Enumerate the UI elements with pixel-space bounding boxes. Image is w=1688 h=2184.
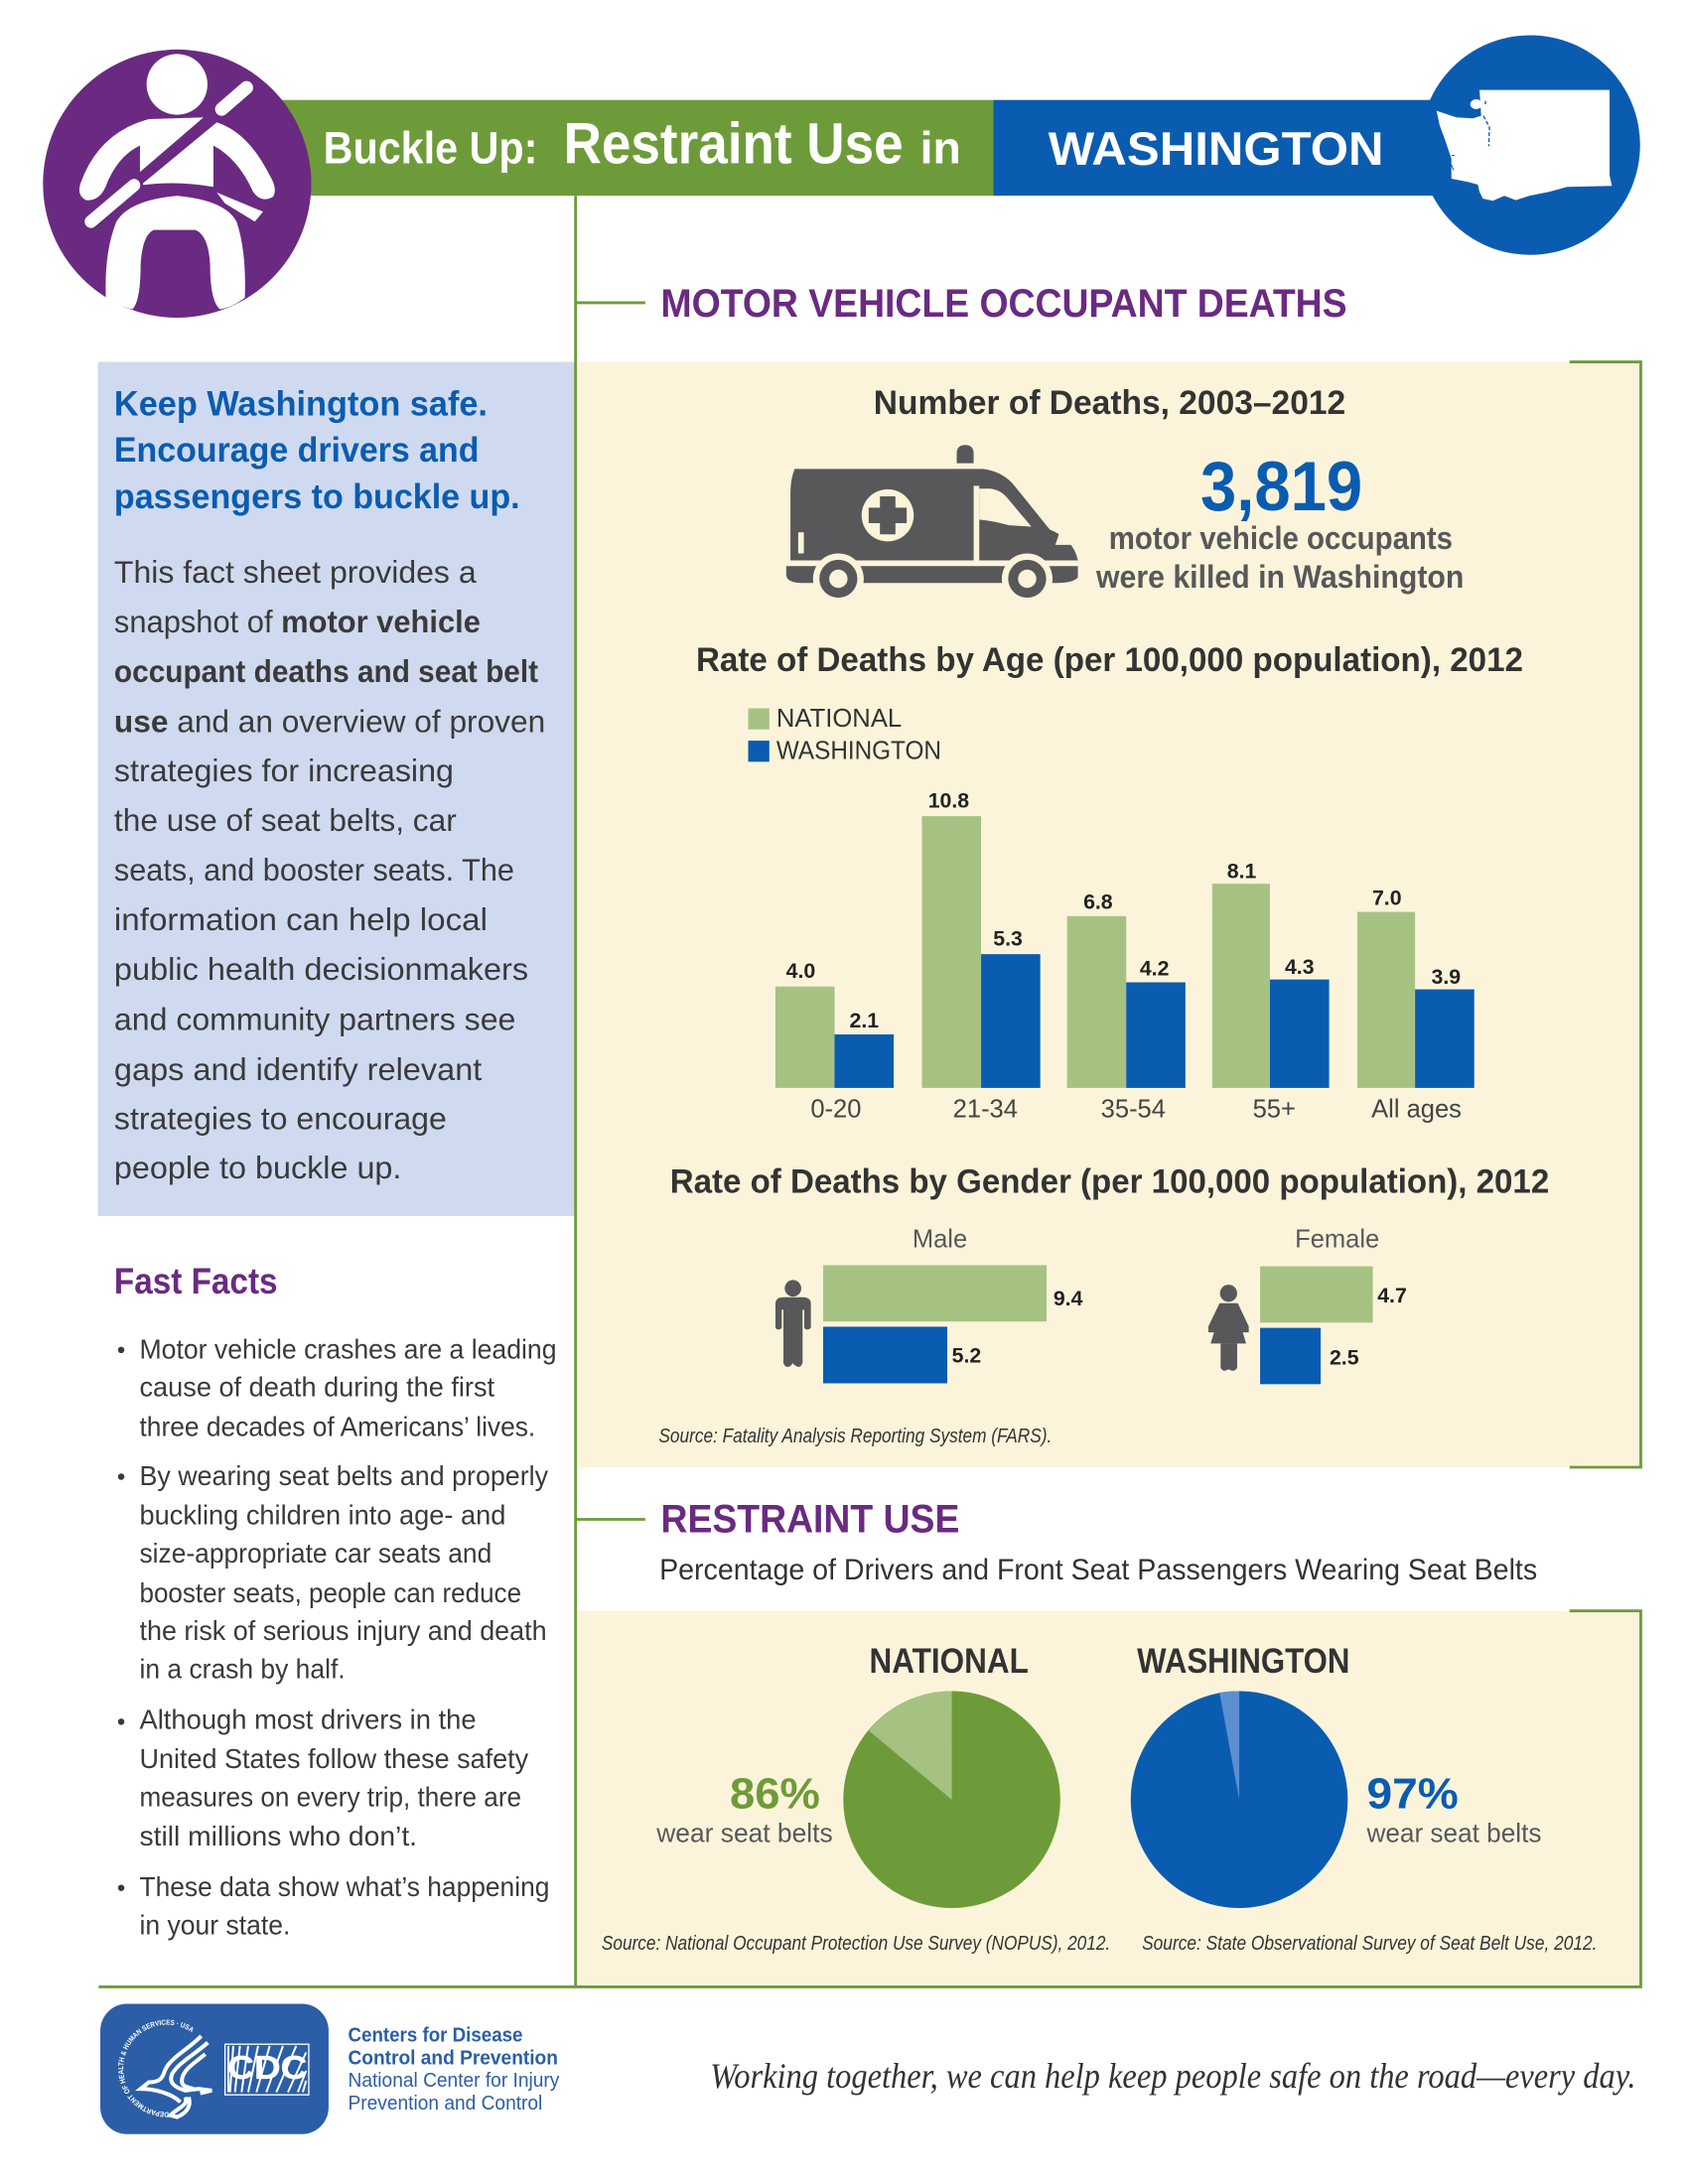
fast facts heading: Fast Facts (114, 1261, 278, 1301)
source note: NOPUS: Source: National Occupant Protection Use Survey (NOPUS), 2012. (602, 1933, 1110, 1955)
heading: rate by age: Rate of Deaths by Age (per 100,000 population), 2012 (696, 641, 1523, 679)
statistic: 3,819 (1095, 448, 1464, 595)
banner title text: in (920, 123, 961, 174)
intro heading: Keep Washington safe. (114, 383, 488, 423)
logo: HHS and CDC: DEPARTMENT OF HEALTH & HUMAN SERVICES · USA (118, 2019, 193, 2117)
bar chart: rate by age: All ages (1371, 1096, 1462, 1124)
state name: WASHINGTON (1049, 123, 1383, 175)
chart legend: NATIONAL (776, 705, 902, 733)
banner title text (324, 112, 961, 177)
bar chart: rate by age: 8.1 (1227, 860, 1257, 884)
subheading: Percentage of Drivers and Front Seat Passengers Wearing Seat Belts (659, 1554, 1537, 1586)
chart: female (1208, 1226, 1407, 1384)
agency name: National Center for Injury (349, 2070, 559, 2092)
bar chart: rate by age: 4.2 (1140, 956, 1169, 980)
heading: rate by gender: Rate of Deaths by Gender (per 100,000 population), 2012 (670, 1162, 1549, 1200)
intro body: occupant deaths and seat belt (114, 654, 539, 689)
heading: number of deaths: Number of Deaths, 2003–2012 (874, 384, 1345, 422)
intro heading: passengers to buckle up. (114, 477, 520, 516)
chart: female: 4.7 (1377, 1284, 1407, 1307)
intro body: the use of seat belts, car (114, 803, 457, 838)
logo: HHS and CDC: CDC (227, 2050, 307, 2087)
pie chart: Washington: 97% (1366, 1769, 1459, 1818)
banner title text: Buckle Up: (324, 123, 537, 174)
intro body: seats, and booster seats. The (114, 853, 514, 887)
pie chart: national: 86% (730, 1769, 820, 1818)
bar chart: rate by age: 35-54 (1101, 1096, 1166, 1124)
bar chart: rate by age: 10.8 (928, 789, 969, 813)
bar chart: rate by age: 4.0 (786, 959, 815, 983)
logo: HHS and CDC (100, 2003, 329, 2134)
fast facts bullets: cause of death during the first (139, 1372, 494, 1403)
chart: male (775, 1226, 1083, 1383)
bar chart: rate by age: 4.3 (1285, 955, 1315, 979)
chart: male: 5.2 (952, 1343, 981, 1367)
pie chart: Washington (1131, 1641, 1541, 1908)
panel: fast facts (114, 1261, 557, 1941)
chart legend (749, 705, 941, 765)
source note: state survey: Source: State Observational Survey of Seat Belt Use, 2012. (1142, 1933, 1597, 1955)
chart: male: 9.4 (1054, 1287, 1083, 1310)
fast facts bullets: These data show what’s happening (139, 1871, 549, 1902)
fast facts bullets (118, 1333, 557, 1941)
fast facts bullets: in your state. (139, 1910, 290, 1941)
fast facts bullets: measures on every trip, there are (139, 1781, 521, 1812)
intro body: This fact sheet provides a (114, 555, 477, 590)
intro body: people to buckle up. (114, 1151, 401, 1185)
fast facts bullets: Although most drivers in the (139, 1704, 477, 1734)
chart: female: Female (1295, 1226, 1379, 1254)
bar chart: rate by age: 3.9 (1432, 965, 1461, 989)
statistic caption: were killed in Washington (1095, 558, 1464, 595)
panel: intro text (114, 383, 545, 1185)
intro heading: Encourage drivers and (114, 430, 479, 470)
icon: ambulance (786, 445, 1078, 605)
bar chart: rate by age (775, 789, 1475, 1124)
bar chart: rate by age: 21-34 (953, 1096, 1018, 1124)
fast facts bullets: in a crash by half. (139, 1653, 346, 1684)
pie chart: national (655, 1641, 1060, 1908)
statistic: 3,819: 3,819 (1200, 448, 1362, 526)
chart legend: WASHINGTON (776, 738, 941, 765)
bar chart: rate by age: 55+ (1253, 1096, 1296, 1124)
bar chart: rate by age: 2.1 (850, 1009, 879, 1032)
icon: person with seat belt (43, 50, 311, 318)
agency name: Centers for Disease (349, 2025, 522, 2047)
heading: restraint use: RESTRAINT USE (661, 1497, 959, 1541)
fast facts bullets: the risk of serious injury and death (139, 1615, 547, 1646)
intro body: snapshot of motor vehicle (114, 605, 481, 639)
intro body: and community partners see (114, 1003, 515, 1037)
fast facts bullets: size-appropriate car seats and (139, 1538, 492, 1569)
pie chart: national: wear seat belts (655, 1818, 833, 1847)
intro body: strategies for increasing (114, 753, 454, 788)
bar chart: rate by age: 6.8 (1083, 890, 1113, 914)
fast facts bullets: By wearing seat belts and properly (139, 1460, 548, 1491)
intro body: use and an overview of proven (114, 705, 545, 740)
fast facts bullets: buckling children into age- and (139, 1500, 505, 1531)
bar chart: rate by age: 7.0 (1372, 886, 1402, 909)
panel: restraint use background (579, 1611, 1640, 1986)
banner title text: Restraint Use (564, 112, 904, 177)
chart: male: Male (913, 1226, 967, 1254)
heading: motor vehicle occupant deaths: MOTOR VEHICLE OCCUPANT DEATHS (661, 282, 1347, 326)
statistic caption: motor vehicle occupants (1109, 519, 1453, 556)
bar chart: rate by age: 5.3 (993, 927, 1023, 951)
intro body: gaps and identify relevant (114, 1052, 483, 1087)
chart: female: 2.5 (1330, 1345, 1359, 1369)
green frame lines (98, 196, 1640, 1986)
bar chart: rate by age: 0-20 (810, 1096, 861, 1124)
panel: deaths background (579, 362, 1640, 1467)
pie chart: Washington: wear seat belts (1365, 1818, 1541, 1847)
panel: intro background (98, 362, 575, 1216)
title banner (282, 100, 1445, 196)
intro body: information can help local (114, 902, 488, 937)
intro heading (114, 383, 520, 516)
agency name: Control and Prevention (349, 2047, 558, 2069)
intro body: public health decisionmakers (114, 952, 528, 987)
intro body: strategies to encourage (114, 1102, 447, 1137)
fast facts bullets: United States follow these safety (139, 1743, 528, 1774)
fast facts bullets: three decades of Americans’ lives. (139, 1411, 535, 1441)
pie chart: Washington: WASHINGTON (1137, 1641, 1349, 1681)
fast facts bullets: still millions who don’t. (139, 1821, 417, 1851)
fast facts bullets: booster seats, people can reduce (139, 1577, 521, 1608)
agency name: Prevention and Control (349, 2093, 542, 2115)
source note: FARS: Source: Fatality Analysis Reporting System (FARS). (658, 1426, 1052, 1447)
fast facts bullets: Motor vehicle crashes are a leading (139, 1333, 557, 1364)
pie chart: national: NATIONAL (870, 1641, 1029, 1681)
intro body (114, 555, 545, 1185)
icon: Washington state map (1420, 35, 1640, 255)
